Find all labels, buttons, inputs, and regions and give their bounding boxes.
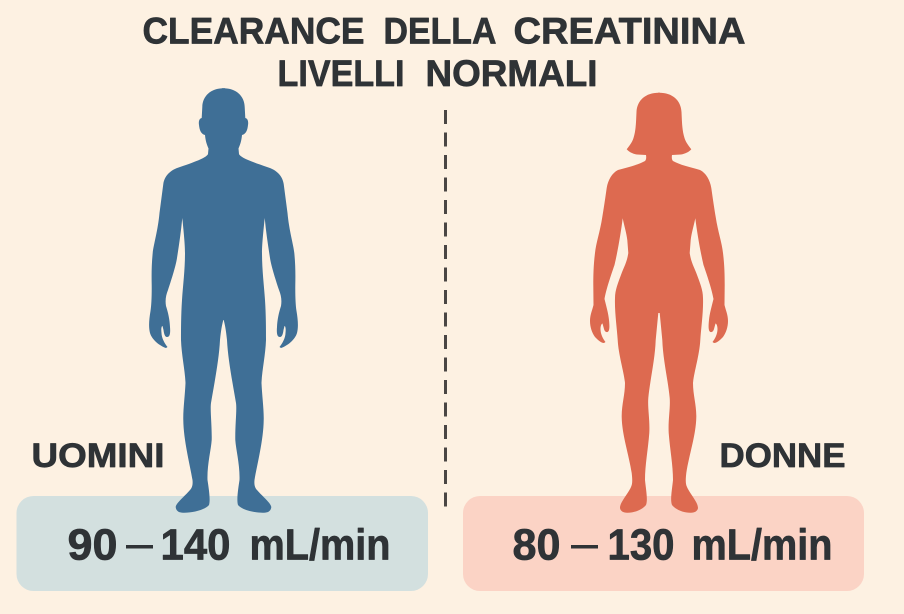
panel: men range background xyxy=(16,496,428,591)
label: women: DONNE xyxy=(720,437,846,475)
title: LIVELLI xyxy=(278,52,404,94)
value: women range: 80 xyxy=(512,520,560,570)
center dashed divider xyxy=(444,110,447,507)
value: men range: 90 xyxy=(68,520,118,570)
value: women range: 130 xyxy=(608,520,674,570)
value: women range: mL/min xyxy=(692,520,832,570)
value: men range: mL/min xyxy=(250,520,390,570)
title: CREATININA xyxy=(514,10,746,52)
icon: male silhouette xyxy=(149,88,298,513)
icon: female silhouette xyxy=(590,93,728,513)
title: DELLA xyxy=(384,10,496,52)
title: CLEARANCE xyxy=(142,10,364,52)
title: NORMALI xyxy=(426,52,598,94)
value: men range: 140 xyxy=(160,520,230,570)
value: women range xyxy=(512,520,832,570)
panel: women range background xyxy=(463,496,864,591)
value: men range xyxy=(68,520,390,570)
label: men: UOMINI xyxy=(32,437,164,475)
title xyxy=(142,10,746,94)
